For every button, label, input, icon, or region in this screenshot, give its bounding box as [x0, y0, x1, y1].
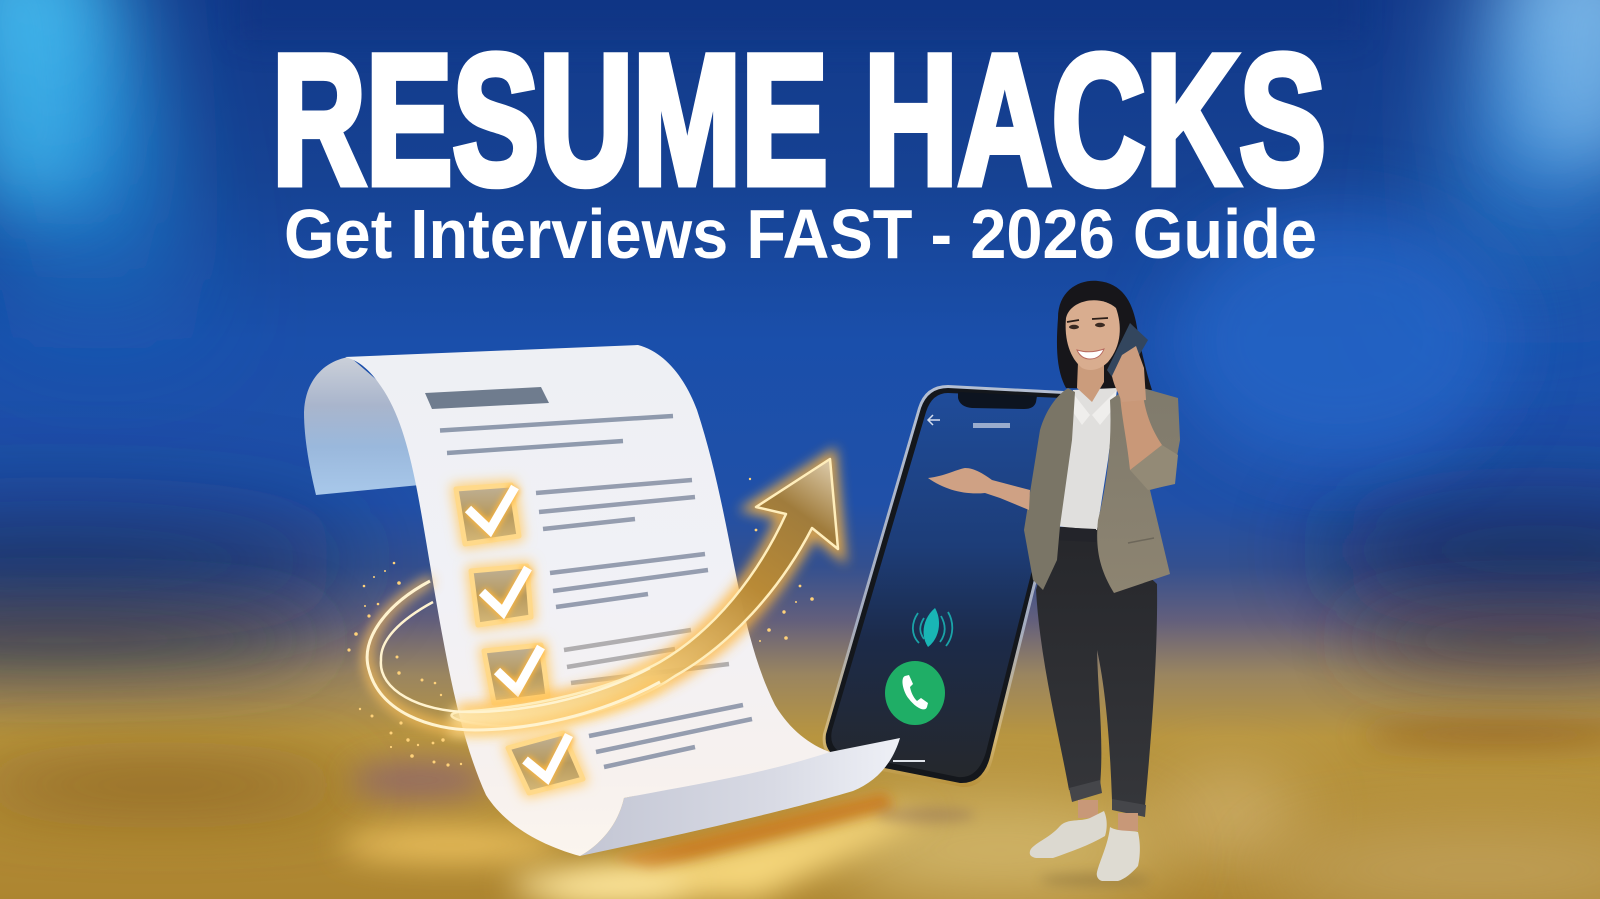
left spotlight beam	[0, 0, 210, 380]
handset icon	[902, 675, 928, 709]
checkbox 1	[454, 483, 521, 546]
text lines group 3	[564, 630, 729, 683]
pants cuffs	[1069, 780, 1146, 817]
gold floor shading	[0, 763, 360, 807]
eyebrows and eyes	[1067, 318, 1108, 329]
swoosh glow	[367, 580, 660, 730]
checkbox 4	[506, 731, 585, 795]
shirt collar	[1068, 390, 1117, 425]
golden growth arrow with orbit swoosh	[347, 459, 838, 767]
back arrow	[928, 415, 940, 425]
hair back	[1057, 281, 1152, 390]
right spotlight beam	[1410, 0, 1600, 360]
text lines group 4	[589, 705, 752, 767]
belt	[1054, 527, 1096, 542]
blazer	[1024, 385, 1180, 593]
subtitle: Get Interviews FAST - 2026 Guide	[284, 195, 1317, 273]
forearm raised to phone	[1120, 395, 1162, 470]
illustration: smartphone	[823, 385, 1079, 787]
face	[1066, 300, 1120, 370]
paper back curl	[304, 357, 420, 495]
dark side bands at the horizon	[0, 510, 360, 610]
arrow body	[452, 459, 838, 726]
pocket flap	[1128, 538, 1154, 543]
illustration: curled resume paper	[304, 345, 900, 856]
sparkles	[347, 478, 814, 767]
sneakers	[1030, 811, 1140, 881]
swoosh inner ring	[381, 602, 650, 712]
neck	[1077, 362, 1104, 402]
rolled sleeve	[1130, 445, 1178, 490]
sound waves and leaf icon	[913, 608, 952, 647]
green call button	[885, 661, 945, 725]
floor glow and shadows under the paper	[340, 760, 1150, 899]
paper bottom flap	[580, 738, 900, 856]
paper front sheet	[345, 345, 830, 856]
phone body	[823, 385, 1079, 787]
hand on phone	[1112, 346, 1146, 402]
screen header	[973, 423, 1010, 428]
home indicator	[893, 760, 925, 762]
phone screen	[831, 393, 1072, 777]
extended forearm and hand	[928, 468, 1030, 510]
swoosh outer ring	[367, 581, 660, 730]
resume intro lines	[440, 416, 673, 453]
illustration: smiling woman on the phone	[928, 281, 1180, 881]
pants	[1036, 527, 1157, 806]
bright band where the swoosh crosses the paper	[450, 675, 660, 723]
ankles	[1078, 800, 1138, 831]
shirt	[1054, 388, 1117, 530]
text lines group 2	[550, 554, 708, 607]
resume heading bar	[425, 387, 549, 409]
handheld phone	[1107, 323, 1148, 388]
checkbox 3	[482, 643, 550, 705]
checkbox 2	[469, 564, 533, 627]
smile	[1077, 349, 1104, 359]
phone bezel	[826, 388, 1076, 783]
phone notch	[958, 392, 1037, 409]
text lines group 1	[536, 480, 695, 529]
arrow outer glow	[458, 459, 838, 717]
